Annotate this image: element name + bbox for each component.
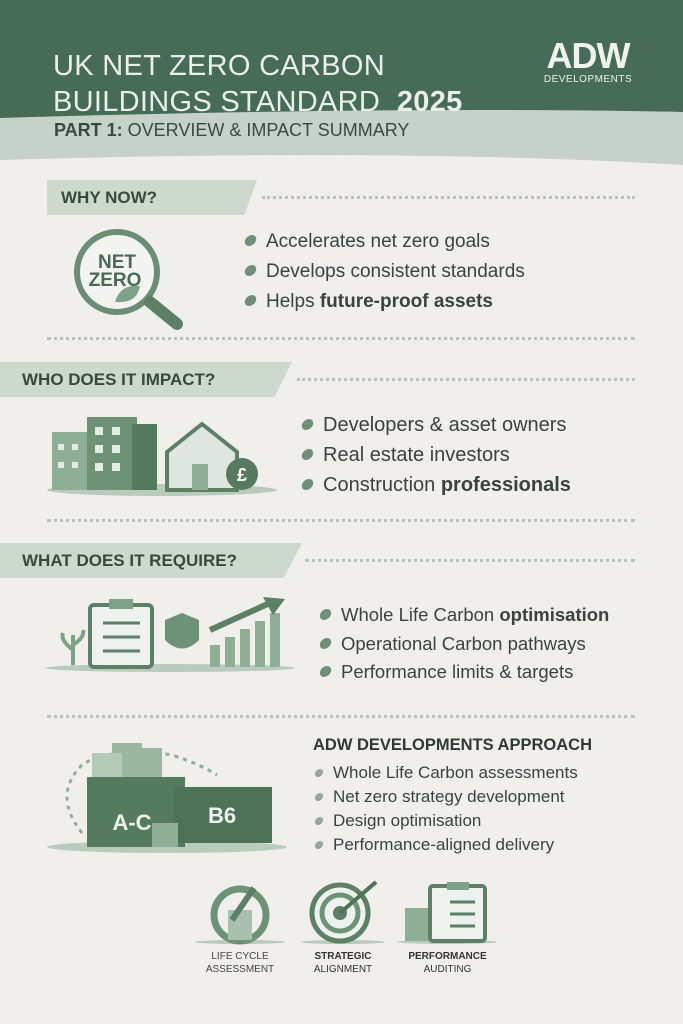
bullets: approach: Performance-aligned delivery xyxy=(333,835,554,854)
bullets: why now xyxy=(244,231,525,312)
bullets: why now: Develops consistent standards xyxy=(266,261,525,282)
subtitle: PART 1: OVERVIEW & IMPACT SUMMARY xyxy=(54,120,409,140)
icon: net zero magnifier xyxy=(74,229,183,330)
logo: DEVELOPMENTS xyxy=(544,74,632,85)
bullets: what xyxy=(320,604,609,682)
section: why now: WHY NOW? xyxy=(61,188,157,207)
icon: A-C B6 blocks xyxy=(47,743,287,853)
icon: life cycle assessment: LIFE CYCLE xyxy=(211,951,269,962)
icon: performance auditing: AUDITING xyxy=(424,964,471,975)
bullets: who: Construction professionals xyxy=(323,474,571,496)
title: BUILDINGS STANDARD 2025 xyxy=(53,86,463,118)
bullets: who: Real estate investors xyxy=(323,444,510,466)
icon: buildings: £ xyxy=(237,465,247,485)
approach heading: ADW DEVELOPMENTS APPROACH xyxy=(313,736,592,754)
bullets: approach: Whole Life Carbon assessments xyxy=(333,763,578,782)
section: who xyxy=(0,362,292,397)
title: UK NET ZERO CARBON xyxy=(53,50,385,82)
section: what xyxy=(0,543,302,578)
icon: performance auditing: PERFORMANCE xyxy=(408,951,487,962)
logo: ADW xyxy=(546,35,629,76)
section: why now xyxy=(47,180,257,215)
bullets: approach: Design optimisation xyxy=(333,811,481,830)
icon: strategic alignment: ALIGNMENT xyxy=(314,964,372,975)
bullets: what: Performance limits & targets xyxy=(341,661,573,682)
bullets: what: Operational Carbon pathways xyxy=(341,633,586,654)
bullets: approach: Net zero strategy development xyxy=(333,787,565,806)
icon: performance auditing xyxy=(397,882,497,975)
icon: buildings xyxy=(47,417,277,496)
icon: life cycle assessment: ASSESSMENT xyxy=(206,964,274,975)
title xyxy=(53,50,463,118)
icon: net zero magnifier: ZERO xyxy=(89,270,141,291)
section: who: WHO DOES IT IMPACT? xyxy=(22,370,215,389)
icon: A-C B6 blocks: B6 xyxy=(208,803,236,828)
section: what: WHAT DOES IT REQUIRE? xyxy=(22,551,237,570)
icon: life cycle assessment xyxy=(195,886,285,975)
icon: A-C B6 blocks: A-C xyxy=(112,810,152,835)
icon: strategic alignment: STRATEGIC xyxy=(314,951,372,962)
icon: requirements xyxy=(45,597,295,672)
bullets: who xyxy=(302,414,571,496)
bullets: who: Developers & asset owners xyxy=(323,414,566,436)
header band xyxy=(0,0,683,165)
bullets: approach xyxy=(314,763,578,854)
bullets: what: Whole Life Carbon optimisation xyxy=(341,604,609,625)
icon: strategic alignment xyxy=(301,880,385,975)
bullets: why now: Helps future-proof assets xyxy=(266,291,493,312)
bullets: why now: Accelerates net zero goals xyxy=(266,231,490,252)
icon: net zero magnifier: NET xyxy=(98,252,136,273)
